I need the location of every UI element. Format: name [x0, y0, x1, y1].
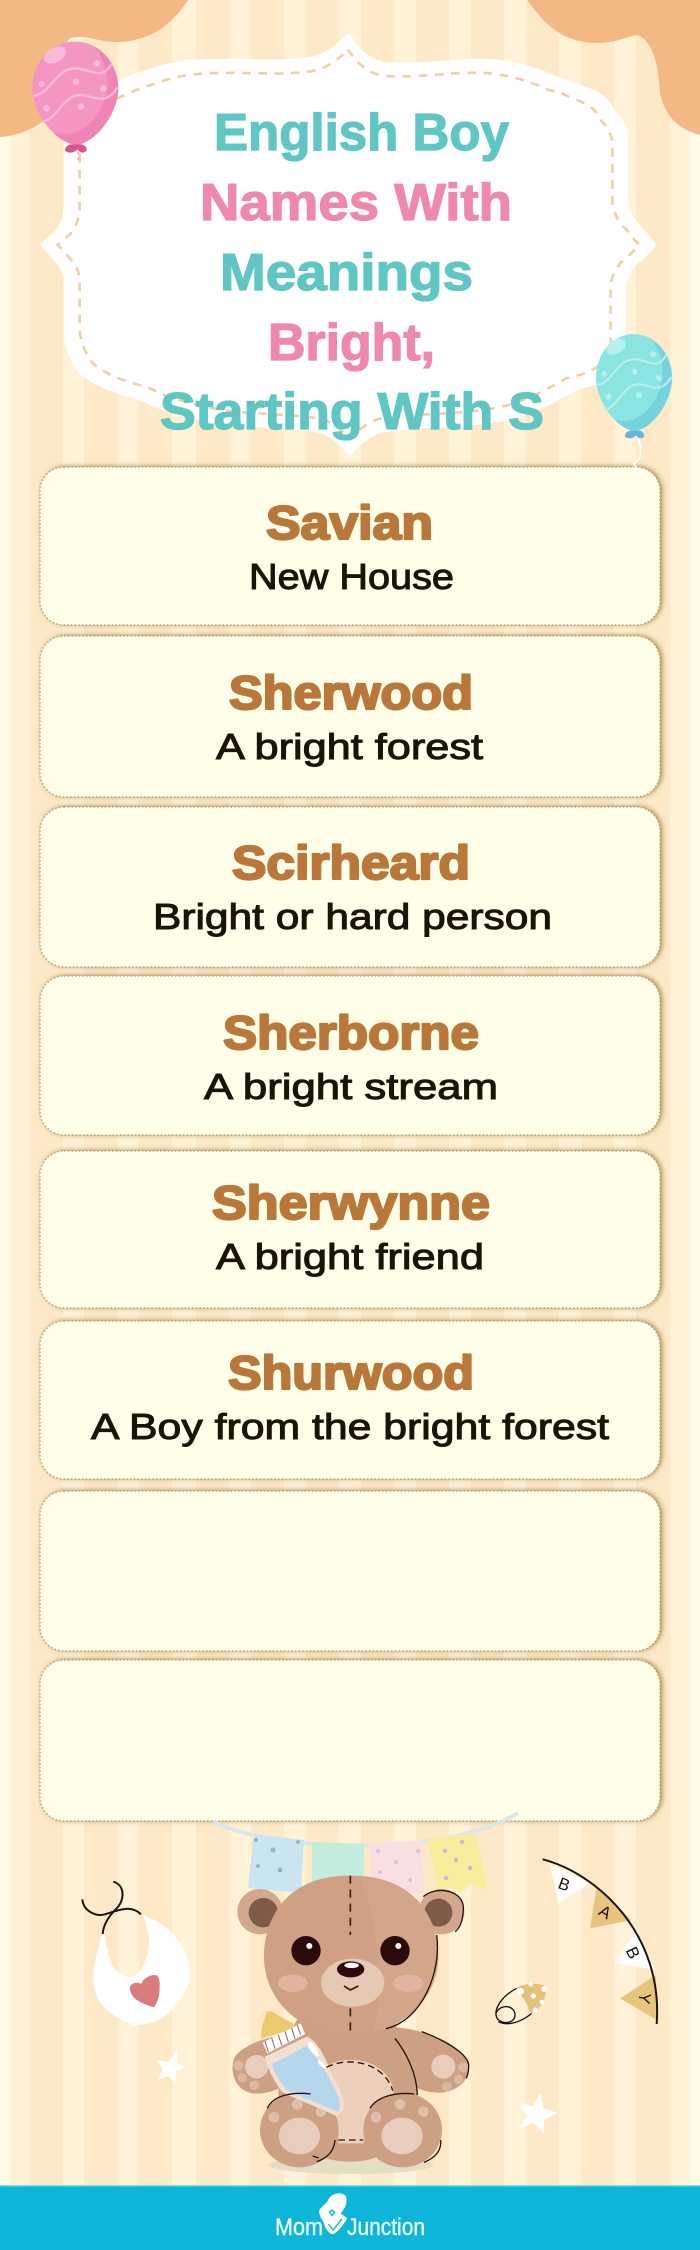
ground shadow [268, 2156, 433, 2174]
card 1: Savian: Savian [266, 496, 433, 549]
icon: teal balloon [596, 334, 672, 483]
right orange drape [527, 0, 700, 135]
card 3: Scirheard: Scirheard [232, 836, 470, 889]
card 1: Savian: New House [249, 556, 454, 597]
card 6: Shurwood: A Boy from the bright forest [91, 1406, 609, 1447]
heart [130, 1975, 160, 2007]
card 8: empty [40, 1660, 660, 1821]
BABY banner [543, 1859, 657, 2024]
title: English Boy [214, 104, 509, 162]
icon: left star [156, 2050, 186, 2085]
icon: bib [82, 1882, 190, 2025]
title: Bright, [268, 314, 435, 372]
card 4: Sherborne [40, 976, 660, 1135]
feet [260, 2093, 442, 2167]
icon: right star [518, 2092, 558, 2134]
teddy bear [232, 1876, 469, 2174]
card 2: Sherwood: Sherwood [229, 666, 473, 719]
icon: pink balloon [32, 42, 118, 160]
BABY banner: A [596, 1901, 615, 1924]
title [160, 104, 544, 441]
card 6: Shurwood [40, 1321, 660, 1479]
card 3: Scirheard [40, 807, 660, 967]
card 2: Sherwood: A bright forest [216, 726, 483, 767]
logo text [275, 2214, 425, 2241]
card 5: Sherwynne [40, 1151, 660, 1308]
logo text: Junction [347, 2214, 425, 2241]
card 5: Sherwynne: Sherwynne [212, 1176, 490, 1229]
footer bar [0, 2185, 700, 2250]
bottle [261, 2011, 344, 2116]
left orange drape [0, 0, 188, 137]
card 4: Sherborne: A bright stream [204, 1066, 498, 1107]
bunting flags [214, 1813, 518, 1895]
head [264, 1876, 438, 2035]
ears [237, 1889, 464, 1934]
BABY banner: Y [634, 1991, 655, 2005]
tummy patch [323, 2060, 394, 2143]
logo icon [319, 2193, 347, 2234]
card 3: Scirheard: Bright or hard person [153, 896, 552, 937]
card 7: empty [40, 1491, 660, 1651]
title plaque [44, 37, 653, 452]
title: Names With [200, 174, 512, 232]
card 1: Savian [40, 467, 660, 625]
bear outlines [267, 1890, 469, 2162]
BABY banner: B [622, 1944, 644, 1962]
card 4: Sherborne: Sherborne [223, 1006, 479, 1059]
torso [278, 2020, 417, 2162]
plaque dashed stitching [58, 49, 639, 440]
title: Meanings [220, 244, 473, 302]
card 6: Shurwood: Shurwood [228, 1346, 474, 1399]
title: Starting With S [160, 383, 544, 441]
logo text: Mom [275, 2214, 323, 2241]
card 2: Sherwood [40, 636, 660, 797]
bib ties [82, 1882, 141, 1934]
card 5: Sherwynne: A bright friend [216, 1236, 484, 1277]
arms [232, 2027, 469, 2094]
icon: safety pin [496, 1982, 547, 2024]
BABY banner: B [556, 1874, 573, 1895]
